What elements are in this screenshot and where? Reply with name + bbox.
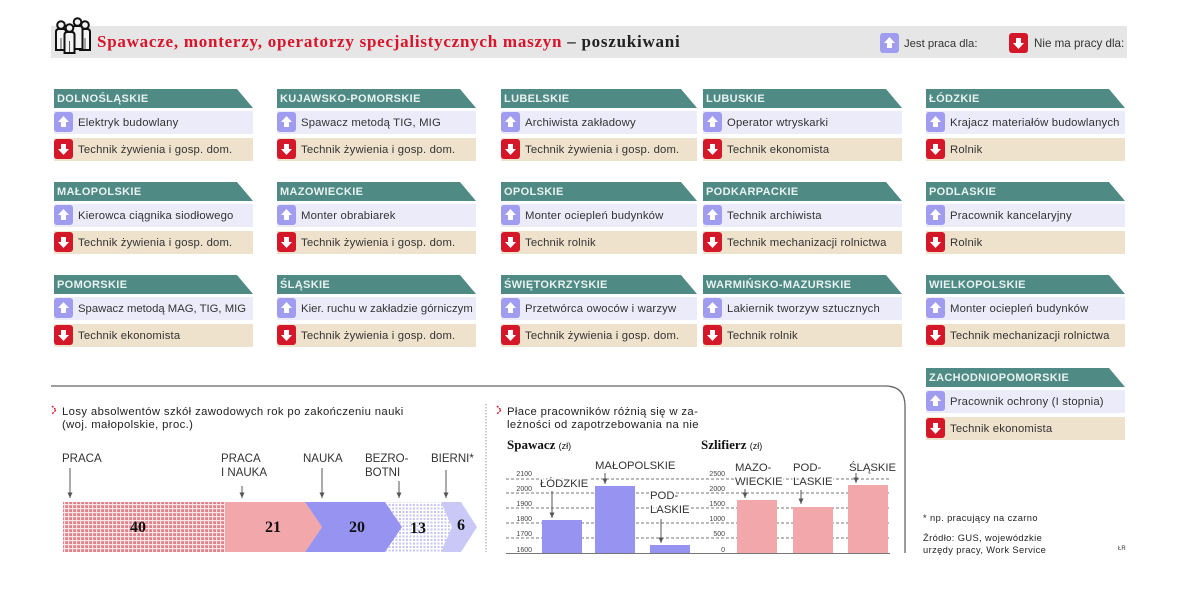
axis labels: Szlifierz: 1500	[709, 501, 725, 508]
panel: WARMIŃSKO-MAZURSKIE: Lakiernik tworzyw sztucznych	[727, 303, 880, 315]
panel: WIELKOPOLSKIE: WIELKOPOLSKIE	[929, 279, 1026, 291]
axis labels: Szlifierz: 500	[713, 531, 725, 538]
subheading: Szlifierz: Szlifierz (zł)	[701, 437, 762, 452]
panel: MAZOWIECKIE: Monter obrabiarek	[301, 210, 396, 222]
segment labels: PRACA	[62, 453, 102, 465]
panel: PODLASKIE: Pracownik kancelaryjny	[950, 210, 1072, 222]
chart: wages	[497, 406, 897, 554]
panel: WARMIŃSKO-MAZURSKIE: WARMIŃSKO-MAZURSKIE	[706, 279, 851, 291]
segment labels: BIERNI*	[431, 453, 474, 465]
panel: PODKARPACKIE: Technik archiwista	[727, 210, 822, 222]
panel: LUBELSKIE: LUBELSKIE	[504, 93, 570, 105]
panel: ŁÓDZKIE	[926, 89, 1125, 161]
bars: Szlifierz	[737, 485, 888, 553]
heading: wages chart: Płace pracowników różnią się w za-	[507, 406, 698, 418]
bar labels	[540, 460, 897, 516]
panel: ŚWIĘTOKRZYSKIE: Przetwórca owoców i warzyw	[525, 303, 676, 315]
bar labels: POD-	[650, 490, 678, 502]
panel: PODKARPACKIE: Technik mechanizacji rolnictwa	[727, 237, 887, 249]
panel: ŚWIĘTOKRZYSKIE	[501, 275, 697, 347]
arrows	[70, 468, 446, 498]
panel: ŁÓDZKIE: ŁÓDZKIE	[929, 93, 980, 105]
icon: workers	[55, 17, 91, 54]
panel: POMORSKIE: Technik ekonomista	[78, 330, 180, 342]
panel: PODKARPACKIE	[703, 182, 902, 254]
segment: nauka 20	[305, 502, 402, 552]
segment: praca i nauka 21	[225, 502, 322, 552]
bar labels: MAZO-	[735, 462, 772, 474]
panel: MAŁOPOLSKIE: Kierowca ciągnika siodłowego	[78, 210, 233, 222]
panel: ŚWIĘTOKRZYSKIE: Technik żywienia i gosp. dom.	[525, 330, 679, 342]
axis labels: Szlifierz: 2000	[709, 486, 725, 493]
segment labels: BEZRO-	[365, 453, 409, 465]
bar labels: ŁÓDZKIE	[540, 477, 589, 490]
bar labels: LASKIE	[650, 504, 690, 516]
legend: no work	[1009, 33, 1124, 53]
axis labels: Spawacz: 1900	[516, 501, 532, 508]
source	[923, 533, 1046, 555]
legend: work available: Jest praca dla:	[904, 38, 977, 50]
panel: LUBELSKIE: Technik żywienia i gosp. dom.	[525, 144, 679, 156]
panel: LUBELSKIE: Archiwista zakładowy	[525, 117, 636, 129]
panel: KUJAWSKO-POMORSKIE: Technik żywienia i gosp. dom.	[301, 144, 455, 156]
gridlines	[506, 479, 890, 538]
panel: MAŁOPOLSKIE: MAŁOPOLSKIE	[57, 186, 142, 198]
panel: OPOLSKIE: Technik rolnik	[525, 237, 596, 249]
panel: PODLASKIE: PODLASKIE	[929, 186, 996, 198]
axis labels: Szlifierz: 0	[721, 547, 725, 554]
panel: KUJAWSKO-POMORSKIE: KUJAWSKO-POMORSKIE	[280, 93, 421, 105]
legend: no work: Nie ma pracy dla:	[1034, 37, 1124, 50]
panel: MAŁOPOLSKIE	[54, 182, 253, 254]
panel: MAZOWIECKIE: Technik żywienia i gosp. dom.	[301, 237, 455, 249]
segment: praca 40: 40	[130, 519, 146, 536]
segment: praca i nauka 21: 21	[265, 519, 281, 536]
panel: PODLASKIE: Rolnik	[950, 237, 982, 249]
bars: Spawacz	[542, 486, 690, 553]
axis labels: Szlifierz: 2500	[709, 471, 725, 478]
header bar	[51, 26, 1127, 58]
legend: work available	[880, 33, 977, 53]
segment labels: PRACA	[221, 453, 261, 465]
heading: wages chart	[497, 406, 699, 431]
panel: ZACHODNIOPOMORSKIE: Technik ekonomista	[950, 423, 1052, 435]
panel: POMORSKIE	[54, 275, 253, 347]
panel: LUBUSKIE: Technik ekonomista	[727, 144, 829, 156]
panel: POMORSKIE: POMORSKIE	[57, 279, 127, 291]
panel: ŚLĄSKIE: ŚLĄSKIE	[280, 279, 330, 291]
panel: WARMIŃSKO-MAZURSKIE	[703, 275, 902, 347]
segment: bierni 6	[438, 502, 477, 552]
panel: OPOLSKIE: OPOLSKIE	[504, 186, 564, 198]
credit: ŁR	[1118, 546, 1126, 552]
bar labels: ŚLĄSKIE	[849, 461, 897, 474]
panel: ŚLĄSKIE: Technik żywienia i gosp. dom.	[301, 330, 455, 342]
segment: nauka 20: 20	[349, 519, 365, 536]
panel: ŚWIĘTOKRZYSKIE: ŚWIĘTOKRZYSKIE	[504, 279, 608, 291]
panel: DOLNOŚLĄSKIE: Elektryk budowlany	[78, 117, 178, 129]
segment: bezrobotni 13: 13	[410, 520, 426, 537]
axis labels: Spawacz: 1600	[516, 547, 532, 554]
segment labels: NAUKA	[303, 453, 343, 465]
panel: MAZOWIECKIE	[277, 182, 476, 254]
source: urzędy pracy, Work Service	[923, 545, 1046, 555]
panel: DOLNOŚLĄSKIE: Technik żywienia i gosp. dom.	[78, 144, 232, 156]
heading: wages chart: leżności od zapotrzebowania na nie	[507, 419, 699, 431]
panel: OPOLSKIE	[501, 182, 697, 254]
panel: DOLNOŚLĄSKIE	[54, 89, 253, 161]
panel: ŚLĄSKIE: Kier. ruchu w zakładzie górniczym	[301, 303, 473, 315]
panel: LUBUSKIE: Operator wtryskarki	[727, 117, 828, 129]
axis labels: Spawacz: 1700	[516, 531, 532, 538]
panel: MAZOWIECKIE: MAZOWIECKIE	[280, 186, 363, 198]
bar labels: LASKIE	[793, 476, 833, 488]
segment: bierni 6: 6	[457, 517, 465, 534]
panel: WIELKOPOLSKIE: Monter ociepleń budynków	[950, 303, 1088, 315]
heading: graduates chart: Losy absolwentów szkół zawodowych rok po zakończeniu nauki	[62, 406, 404, 418]
panel: KUJAWSKO-POMORSKIE: Spawacz metodą TIG, MIG	[301, 117, 441, 129]
segment labels	[62, 453, 474, 479]
subheading: Spawacz: Spawacz (zł)	[507, 437, 571, 452]
segment: praca 40	[63, 502, 233, 552]
bar arrows	[552, 473, 856, 543]
panel: ZACHODNIOPOMORSKIE: ZACHODNIOPOMORSKIE	[929, 372, 1069, 384]
segment labels: I NAUKA	[221, 467, 267, 479]
panel: WARMIŃSKO-MAZURSKIE: Technik rolnik	[727, 330, 798, 342]
panel: ŁÓDZKIE: Krajacz materiałów budowlanych	[950, 117, 1120, 129]
axis labels: Spawacz	[516, 471, 532, 554]
axis labels: Szlifierz	[709, 471, 725, 554]
axis labels: Spawacz: 2100	[516, 471, 532, 478]
title: Spawacze, monterzy, operatorzy specjalistycznych maszyn – poszukiwani	[97, 32, 680, 51]
panel: DOLNOŚLĄSKIE: DOLNOŚLĄSKIE	[57, 93, 149, 105]
axis labels: Szlifierz: 1000	[709, 516, 725, 523]
panel: ŚLĄSKIE	[277, 275, 476, 347]
footnote: * np. pracujący na czarno	[923, 513, 1038, 523]
panel: LUBUSKIE: LUBUSKIE	[706, 93, 765, 105]
panel: POMORSKIE: Spawacz metodą MAG, TIG, MIG	[78, 303, 246, 315]
heading: graduates chart	[52, 406, 404, 431]
panel: LUBUSKIE	[703, 89, 902, 161]
panel: WIELKOPOLSKIE	[926, 275, 1125, 347]
panel: MAŁOPOLSKIE: Technik żywienia i gosp. dom.	[78, 237, 232, 249]
panel: PODLASKIE	[926, 182, 1125, 254]
heading: graduates chart: (woj. małopolskie, proc.)	[62, 419, 193, 431]
panel: PODKARPACKIE: PODKARPACKIE	[706, 186, 799, 198]
panel: OPOLSKIE: Monter ociepleń budynków	[525, 210, 663, 222]
bar labels: MAŁOPOLSKIE	[595, 460, 676, 472]
axis labels: Spawacz: 1800	[516, 516, 532, 523]
axis labels: Spawacz: 2000	[516, 486, 532, 493]
bar labels: POD-	[793, 462, 821, 474]
panel: KUJAWSKO-POMORSKIE	[277, 89, 476, 161]
panel: ŁÓDZKIE: Rolnik	[950, 144, 982, 156]
segment labels: BOTNI	[365, 467, 400, 479]
panel: LUBELSKIE	[501, 89, 697, 161]
chart: graduates' outcomes	[52, 406, 477, 552]
bar labels: WIECKIE	[735, 476, 783, 488]
segment: bezrobotni 13	[385, 502, 452, 552]
panel: ZACHODNIOPOMORSKIE	[926, 368, 1125, 440]
panel: ZACHODNIOPOMORSKIE: Pracownik ochrony (I stopnia)	[950, 396, 1104, 408]
panel: WIELKOPOLSKIE: Technik mechanizacji rolnictwa	[950, 330, 1110, 342]
source: Źródło: GUS, wojewódzkie	[923, 533, 1042, 543]
